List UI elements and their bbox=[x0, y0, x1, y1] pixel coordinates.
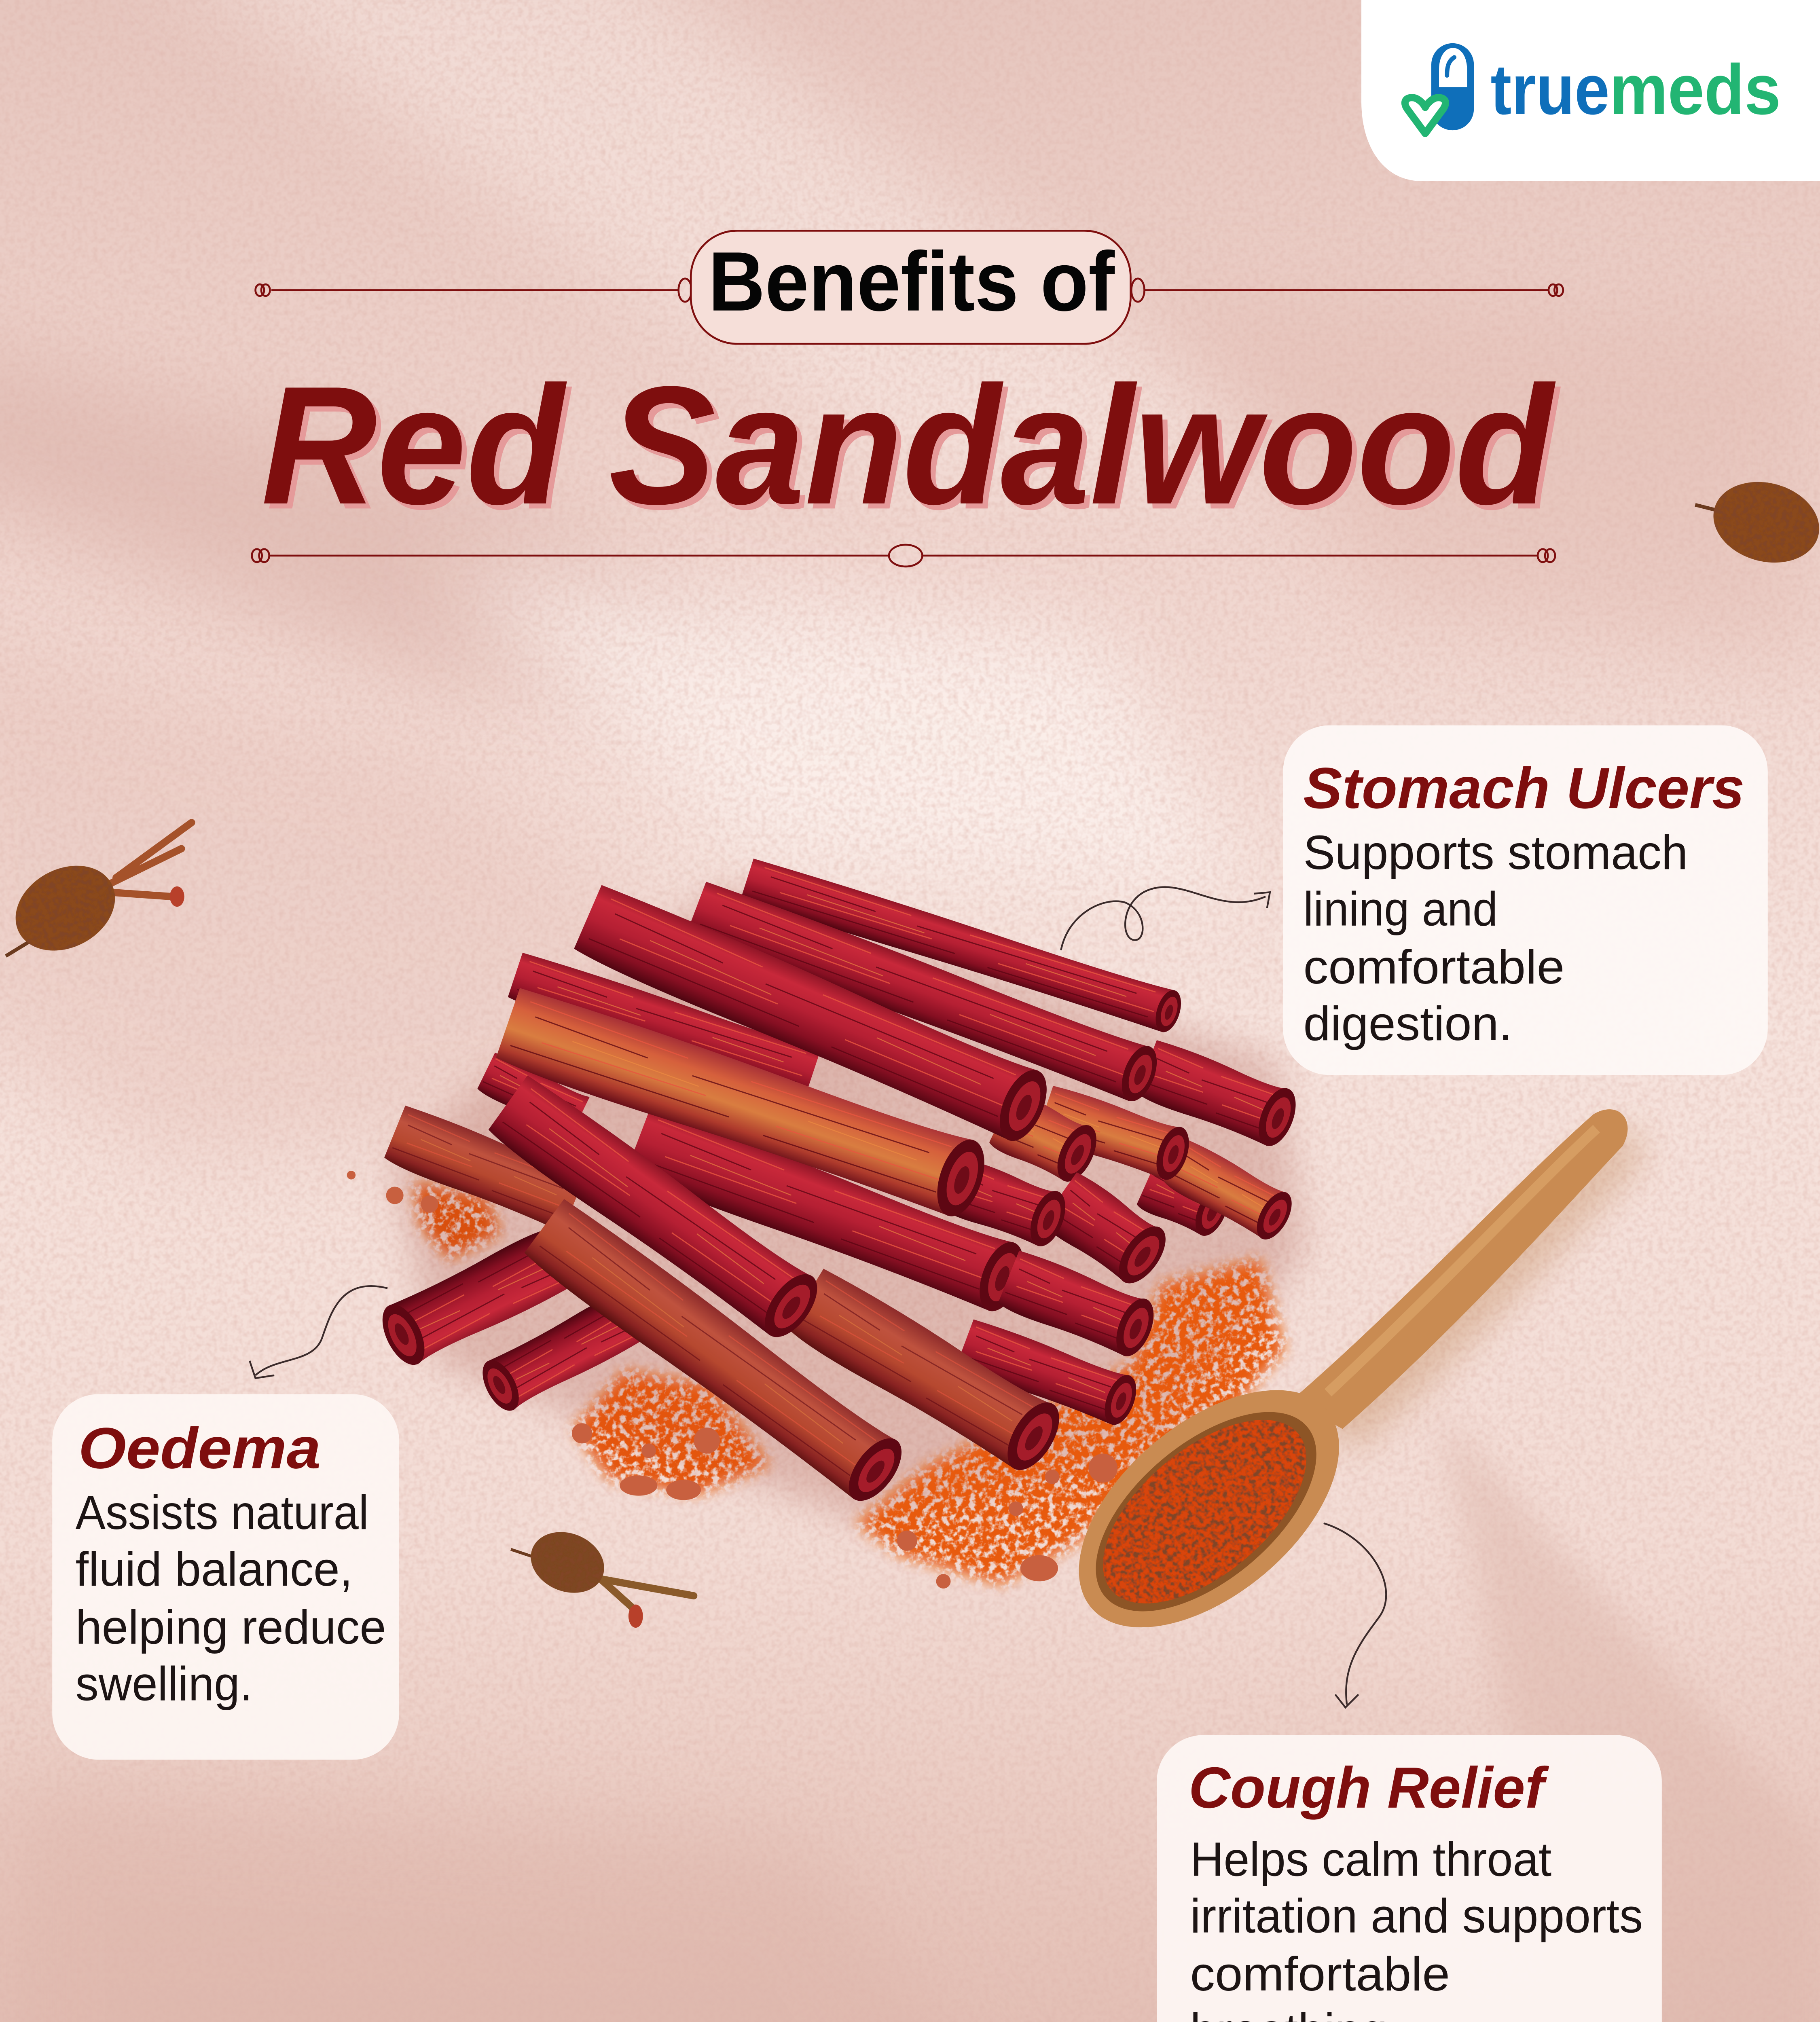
arrow: to Cough Relief bbox=[1324, 1523, 1386, 1707]
logo wordmark: true bbox=[1490, 50, 1610, 129]
pile shadow bbox=[392, 885, 1306, 1523]
powder flakes bbox=[347, 1171, 1117, 1588]
icon: bud left bbox=[1, 823, 192, 967]
panel: Cough Relief: irritation and supports bbox=[1190, 1889, 1643, 1943]
wooden spoon with red powder bbox=[1036, 1109, 1642, 1673]
panel: Cough Relief: Helps calm throat bbox=[1190, 1833, 1551, 1886]
panel: Stomach Ulcers bbox=[1283, 725, 1768, 1075]
panel: Stomach Ulcers: lining and bbox=[1303, 883, 1498, 936]
panel: Cough Relief: Cough Relief bbox=[1189, 1756, 1549, 1820]
logo wordmark bbox=[1490, 50, 1781, 129]
powder scatter bbox=[414, 1182, 1285, 1584]
icon: bud top right bbox=[1695, 471, 1820, 574]
panel: Cough Relief: comfortable bbox=[1190, 1948, 1450, 2001]
panel: Stomach Ulcers: Stomach Ulcers bbox=[1303, 756, 1744, 821]
panel: Oedema: helping reduce bbox=[76, 1601, 386, 1654]
arrow: to Oedema bbox=[250, 1286, 387, 1378]
icon: heart bbox=[1405, 97, 1445, 133]
panel: Stomach Ulcers: digestion. bbox=[1303, 997, 1512, 1051]
panel: Oedema: Assists natural bbox=[76, 1486, 368, 1540]
icon: bud center bbox=[511, 1521, 694, 1628]
panel: Oedema: swelling. bbox=[76, 1657, 252, 1711]
sandalwood sticks pile bbox=[374, 857, 1303, 1510]
icon: capsule bbox=[1431, 43, 1474, 130]
panel: Oedema: Oedema bbox=[78, 1416, 321, 1481]
bottom ornament: line with center oval bbox=[252, 545, 1555, 567]
arrow: to Stomach Ulcers bbox=[1061, 887, 1270, 950]
logo panel: truemeds bbox=[1361, 0, 1820, 181]
panel: Oedema: fluid balance, bbox=[76, 1543, 353, 1596]
top ornament: line with end rings bbox=[256, 279, 1563, 302]
title: Red Sandalwood: Red Sandalwood bbox=[261, 351, 1558, 539]
panel: Stomach Ulcers: Supports stomach bbox=[1303, 826, 1688, 880]
panel: Oedema bbox=[52, 1394, 399, 1760]
panel: Stomach Ulcers: comfortable bbox=[1303, 941, 1564, 994]
panel: Cough Relief bbox=[1157, 1735, 1662, 2022]
logo wordmark: meds bbox=[1610, 50, 1781, 129]
title: Red Sandalwood: Red Sandalwood bbox=[266, 356, 1563, 544]
heading pill: Benefits of: Benefits of bbox=[708, 235, 1115, 329]
